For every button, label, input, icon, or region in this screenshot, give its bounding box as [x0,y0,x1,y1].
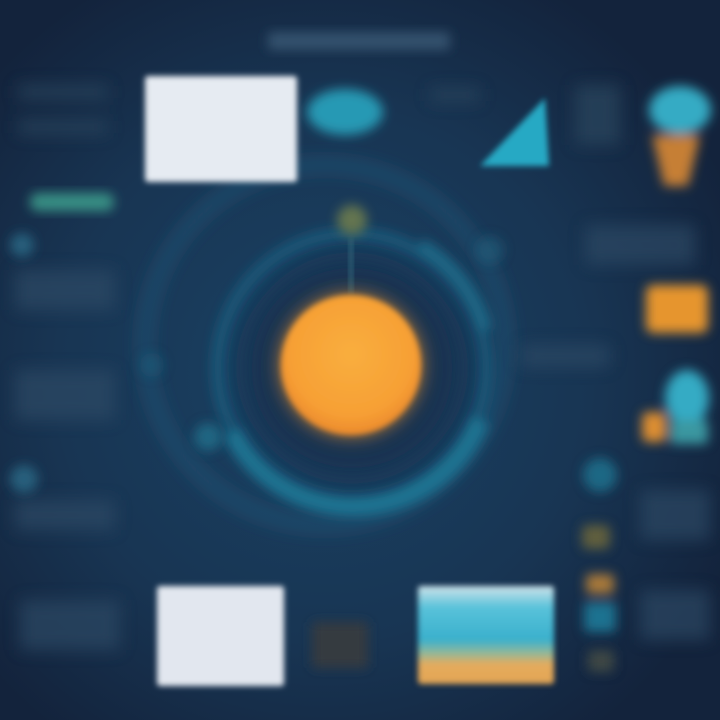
left small icons [10,233,38,493]
icon: bottom brown block [312,622,368,668]
icon: ice-cream cone [649,86,711,186]
title [268,32,450,50]
top text blocks [18,85,620,145]
panel: top white card [145,76,297,182]
connector to the top node [349,238,353,294]
green label [30,193,114,211]
ring nodes [140,236,504,451]
icon: teal triangle [480,98,549,166]
left column text blocks [15,270,120,650]
icon: top node [337,205,367,235]
chart: inner dark disc [244,260,460,476]
icon: orange folder [646,285,708,333]
chart: orange sphere [281,295,421,435]
icon: teal and orange shapes [642,370,709,444]
right vertical icon column [582,458,617,672]
panel: bottom white card [157,586,284,686]
right text blocks [520,225,710,640]
chart: outer ring [145,165,505,525]
chart: orange glow [277,291,425,439]
icon: teal pill [307,89,383,135]
chart: teal ring [218,234,486,507]
panel: bottom beach image [418,586,554,684]
